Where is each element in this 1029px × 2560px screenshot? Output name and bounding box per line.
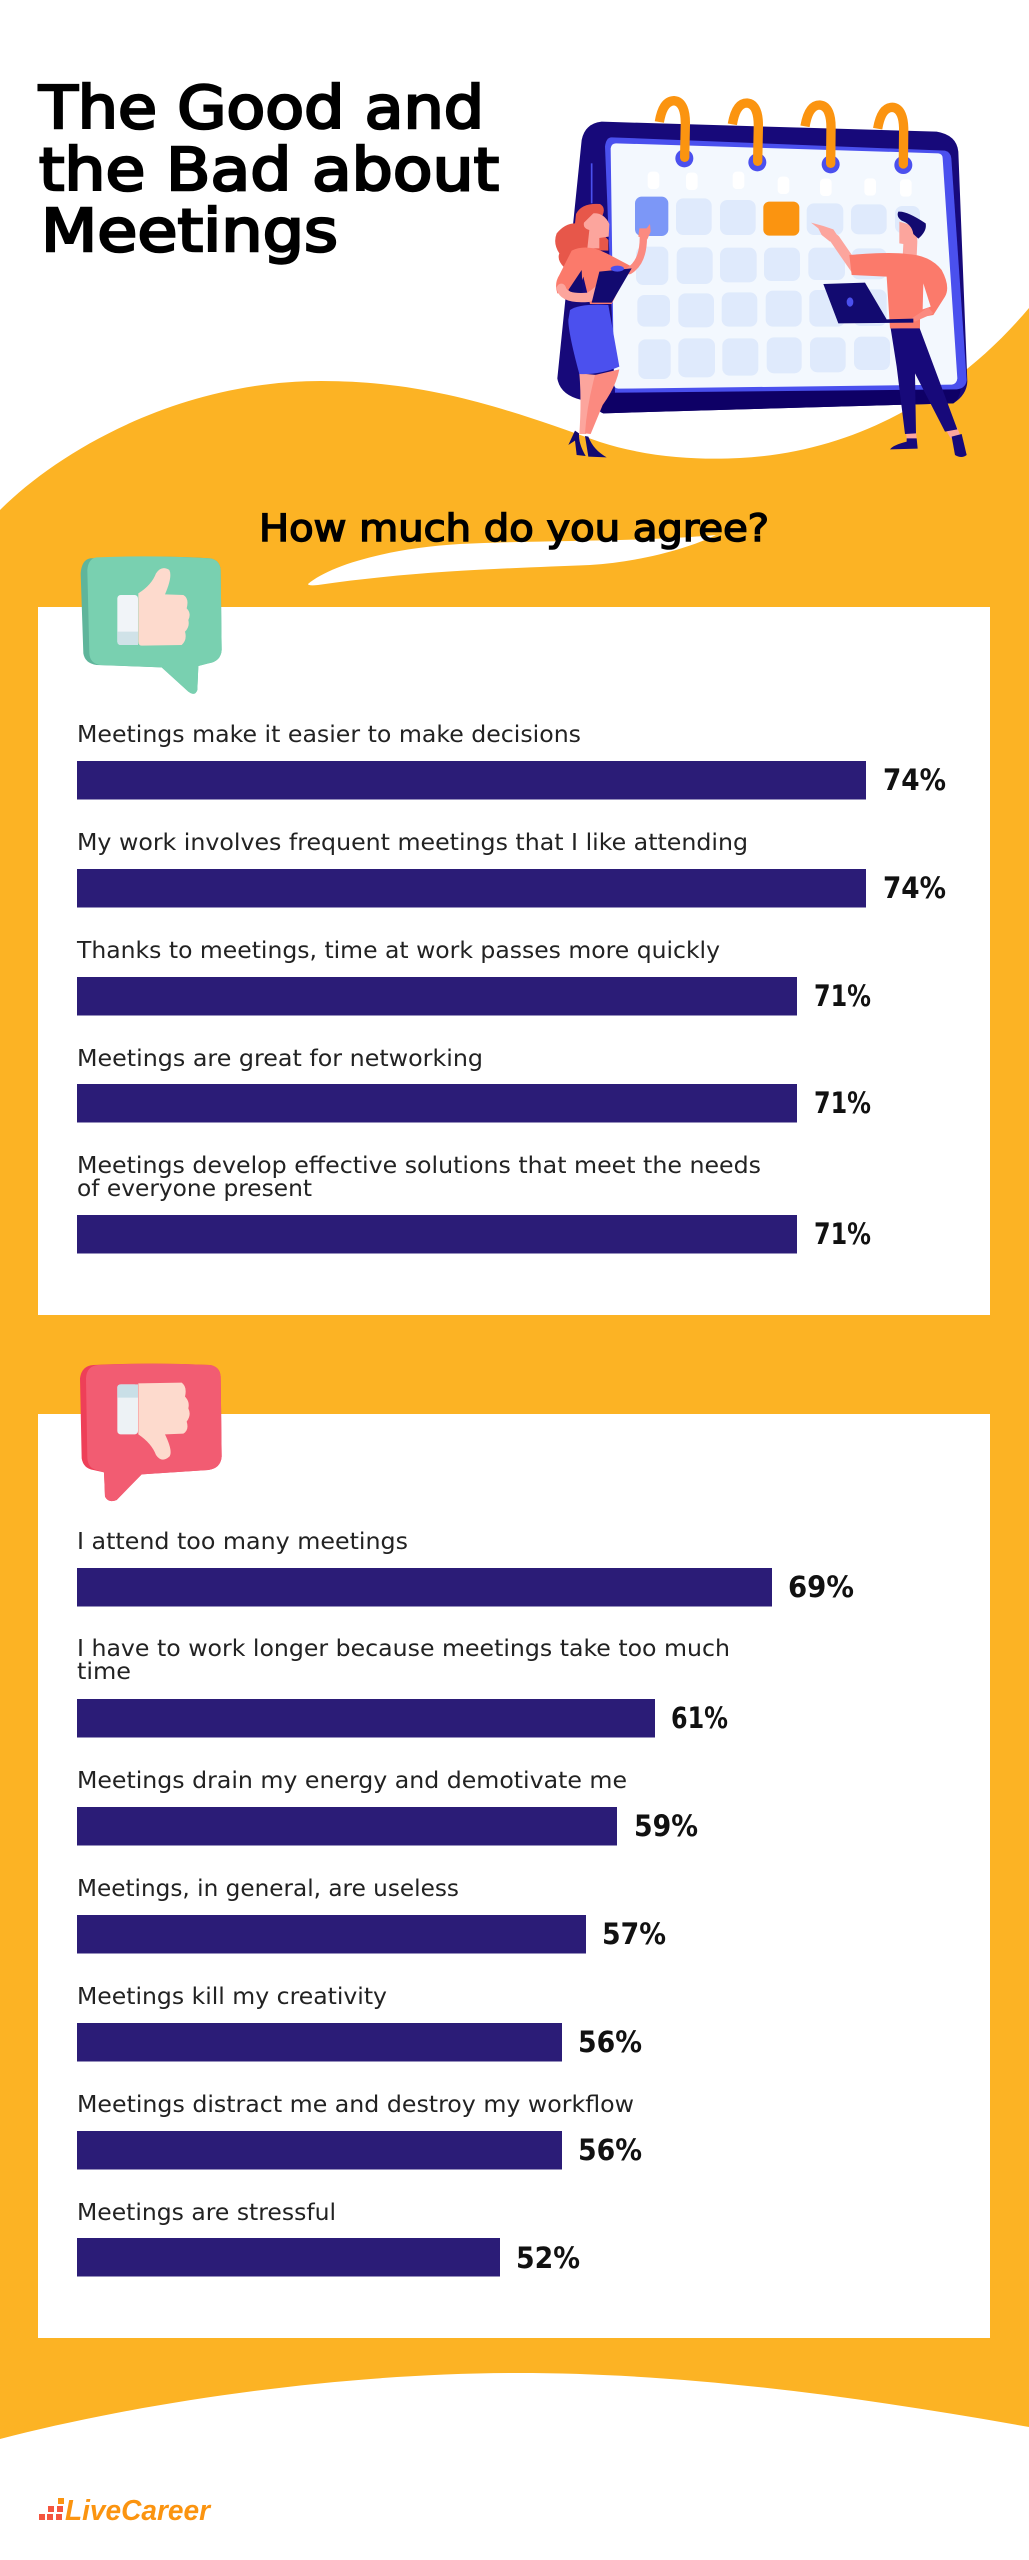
row: too many: 69% (788, 1570, 854, 1604)
row: workflow: Meetings distract me and destroy my workflow (77, 2092, 634, 2118)
binder rings (659, 101, 912, 174)
row: drain energy: 59% (634, 1809, 698, 1843)
woman (555, 204, 651, 457)
logo: LiveCareer: LiveCareer (65, 2495, 212, 2527)
row: networking: Meetings are great for networking (77, 1046, 483, 1072)
calendar body (557, 122, 967, 413)
row: creativity: Meetings kill my creativity (77, 1984, 387, 2010)
title: The Good and (38, 73, 484, 142)
panel: good about meetings (38, 607, 990, 1315)
row: drain energy: Meetings drain my energy and demotivate me (77, 1768, 627, 1794)
man (811, 212, 967, 457)
subtitle: How much do you agree? (259, 507, 769, 550)
icon: thumbs up speech bubble (81, 556, 222, 694)
row: work longer (77, 1636, 730, 1738)
row: effective solutions: Meetings develop effective solutions that meet the needs (77, 1153, 761, 1179)
row: networking (77, 1046, 871, 1122)
row: stressful (77, 2200, 580, 2276)
row: useless: 57% (602, 1917, 666, 1951)
row: time passes (76, 938, 871, 1016)
chart: good statements (76, 722, 946, 1254)
row: frequent meetings: My work involves frequent meetings that I like attending (77, 830, 748, 856)
row: useless: Meetings, in general, are useless (77, 1876, 459, 1902)
row: too many (77, 1529, 854, 1606)
row: creativity (77, 1984, 642, 2062)
row: workflow: 56% (578, 2133, 642, 2167)
row: effective solutions (77, 1153, 871, 1254)
row: work longer: 61% (671, 1701, 728, 1735)
row: frequent meetings: 74% (883, 871, 946, 905)
row: networking: 71% (814, 1086, 871, 1120)
title (38, 73, 499, 265)
illustration: calendar with two people (555, 101, 967, 457)
row: effective solutions: 71% (814, 1217, 871, 1251)
row: effective solutions: of everyone present (77, 1176, 312, 1202)
title: Meetings (41, 196, 338, 265)
row: time passes: 71% (814, 979, 871, 1013)
row: decisions: 74% (883, 763, 946, 797)
icon: thumbs down speech bubble (80, 1364, 222, 1501)
white swoosh behind subtitle (308, 535, 716, 585)
row: stressful: Meetings are stressful (77, 2200, 336, 2226)
row: decisions (77, 722, 946, 800)
row: useless (77, 1876, 666, 1954)
row: time passes: Thanks to meetings, time at work passes more quickly (76, 938, 720, 964)
row: workflow (77, 2092, 642, 2170)
title: the Bad about (39, 135, 499, 204)
row: frequent meetings (77, 830, 946, 908)
row: stressful: 52% (516, 2241, 580, 2275)
row: creativity: 56% (578, 2025, 642, 2059)
row: work longer: time (77, 1659, 131, 1685)
row: drain energy (77, 1768, 698, 1846)
row: work longer: I have to work longer because meetings take too much (77, 1636, 730, 1662)
row: decisions: Meetings make it easier to make decisions (77, 722, 581, 748)
day cells (635, 172, 920, 379)
row: too many: I attend too many meetings (77, 1529, 408, 1555)
panel: bad about meetings (38, 1414, 990, 2338)
chart: bad statements (77, 1529, 854, 2276)
